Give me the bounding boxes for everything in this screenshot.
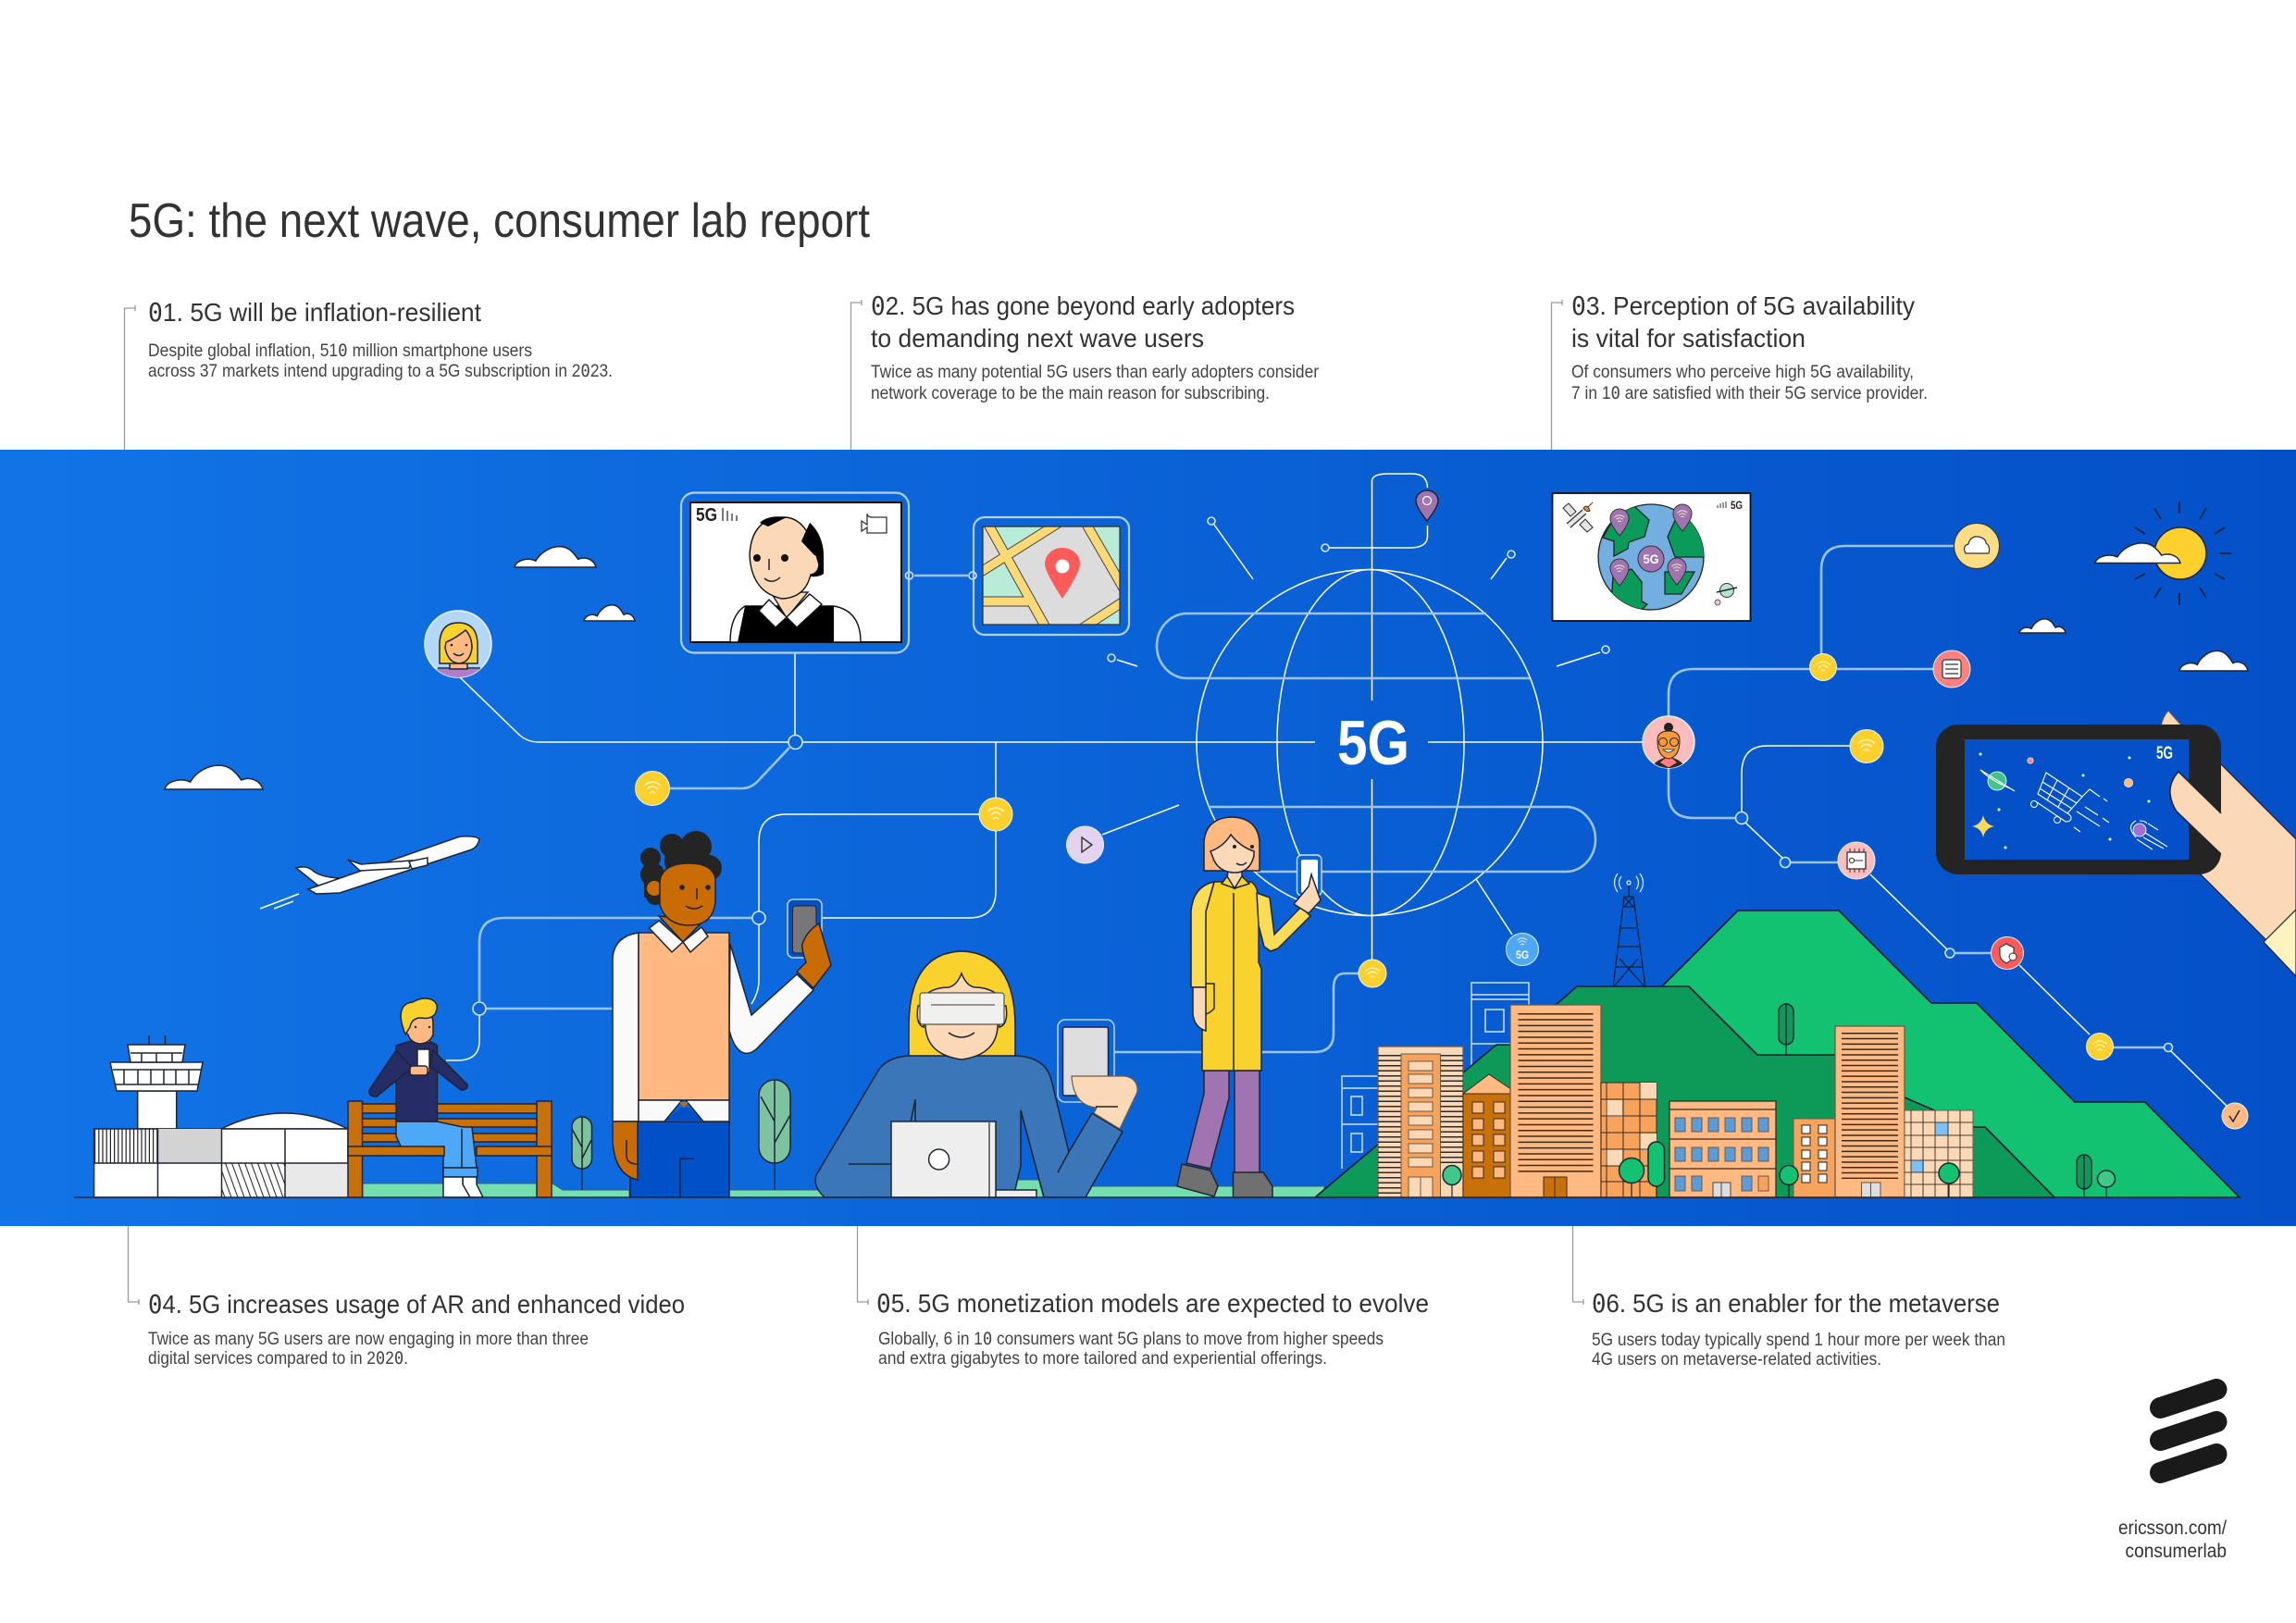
body 05 [878, 1329, 1384, 1369]
building 3 [1510, 1005, 1601, 1197]
thumb [2170, 772, 2221, 854]
panel: finding 01 [124, 297, 613, 450]
icon: satellite earth card: 5G [1731, 499, 1743, 512]
icon: 5G node [1507, 933, 1538, 966]
ghost buildings outline [1342, 983, 1529, 1169]
city trees [1443, 1142, 1959, 1197]
body 05: and extra gigabytes to more tailored and experiential offerings. [878, 1349, 1327, 1369]
panel: finding 03 [1551, 291, 1928, 450]
body 06: 5G users today typically spend 1 hour more per week than [1592, 1331, 2005, 1350]
heading 02: to demanding next wave users [871, 324, 1204, 353]
icon: play button [1066, 826, 1103, 863]
icon: wifi yellow nodes [635, 653, 2114, 1060]
mountain trees [1779, 1004, 2116, 1197]
body 02: Twice as many potential 5G users than early adopters consider [871, 363, 1320, 382]
heading 02 [871, 291, 1295, 353]
body 02 [871, 363, 1320, 403]
icon: sun and clouds [2019, 502, 2248, 671]
heading 03: is vital for satisfaction [1571, 324, 1806, 353]
title: 5G: the next wave, consumer lab report [129, 194, 870, 248]
woman with laptop and VR headset [815, 951, 1137, 1197]
body 04 [148, 1330, 589, 1369]
body 04: digital services compared to in 2020. [148, 1348, 408, 1369]
man with phone [613, 831, 831, 1197]
icon: satellite earth card: 5G [1644, 551, 1659, 566]
body 01 [148, 341, 613, 381]
city buildings [1378, 1005, 1973, 1197]
heading 02: 02. 5G has gone beyond early adopters [871, 291, 1295, 321]
building 5 [1669, 1101, 1776, 1197]
building 4 [1601, 1083, 1657, 1197]
woman in yellow coat [1177, 817, 1322, 1197]
body 03: 7 in 10 are satisfied with their 5G service provider. [1571, 383, 1928, 403]
icon: avatar woman [425, 611, 491, 685]
laptop [891, 1121, 1036, 1197]
body 01: across 37 markets intend upgrading to a 5G subscription in 2023. [148, 361, 613, 381]
torso and arms [630, 1121, 729, 1197]
airport [94, 1035, 348, 1197]
icon: video call tablet: 5G [696, 505, 717, 526]
body 06: 4G users on metaverse-related activities. [1592, 1350, 1881, 1369]
control tower [110, 1035, 203, 1129]
tablet screen content [1972, 744, 2173, 849]
url text: ericsson.com/ [2118, 1518, 2227, 1539]
tablet screen content: 5G [2156, 744, 2173, 763]
body 02: network coverage to be the main reason for subscribing. [871, 384, 1270, 403]
phone [788, 899, 822, 958]
url text: consumerlab [2125, 1541, 2227, 1562]
heading 03: 03. Perception of 5G availability [1571, 291, 1915, 321]
heading 01: 01. 5G will be inflation-resilient [148, 297, 481, 328]
icon: avatar with glasses [1643, 716, 1694, 768]
building 7 [1835, 1026, 1905, 1197]
mountains [1315, 911, 2240, 1197]
phone [1297, 855, 1322, 896]
body 03: Of consumers who perceive high 5G availability, [1571, 363, 1914, 382]
panel: finding 05 [857, 1226, 1429, 1369]
ground line [74, 1196, 2240, 1198]
person on bench [348, 998, 552, 1197]
icon: hand with tablet [1936, 711, 2296, 976]
building 1 [1378, 1047, 1463, 1197]
icon: location pin [1416, 490, 1438, 521]
head [1227, 861, 1242, 888]
heading 03 [1571, 291, 1915, 353]
building 6 [1793, 1119, 1835, 1197]
VR visor [920, 993, 1004, 1024]
icon: map [974, 517, 1129, 635]
panel: finding 04 [128, 1226, 685, 1369]
icon: chip node [1838, 842, 1875, 879]
icon: checklist node [1933, 650, 1970, 688]
body 05: Globally, 6 in 10 consumers want 5G plans to move from higher speeds [878, 1329, 1384, 1349]
5G label: 5G [1337, 708, 1409, 778]
heading 04: 04. 5G increases usage of AR and enhanced video [148, 1289, 685, 1319]
icon: check node [2222, 1103, 2248, 1129]
panel: finding 02 [851, 291, 1320, 450]
park trees [572, 1080, 790, 1190]
globe [1157, 474, 1595, 960]
icon: plane [260, 836, 479, 909]
network lines [446, 517, 2227, 1106]
illustration band [0, 450, 2296, 1226]
clouds left [165, 547, 635, 789]
building 2 [1463, 1074, 1518, 1197]
terminal [94, 1113, 348, 1197]
head [659, 916, 703, 942]
icon: 5G node: 5G [1516, 948, 1529, 961]
body 03 [1571, 363, 1928, 403]
phone [1058, 1020, 1114, 1102]
url text [2118, 1518, 2227, 1562]
bench [348, 1101, 552, 1197]
heading 05: 05. 5G monetization models are expected to evolve [876, 1288, 1429, 1319]
building 8 [1905, 1110, 1973, 1197]
icon: satellite earth card [1553, 493, 1751, 621]
heading 06: 06. 5G is an enabler for the metaverse [1592, 1288, 2000, 1319]
icon: shield node [1992, 936, 2023, 970]
logo [2160, 1390, 2216, 1473]
icon: video call tablet [681, 492, 909, 653]
body 01: Despite global inflation, 510 million smartphone users [148, 341, 532, 361]
body 06 [1592, 1331, 2005, 1369]
body 04: Twice as many 5G users are now engaging in more than three [148, 1330, 589, 1349]
icon: cloud node [1955, 524, 1999, 568]
ground strip [363, 1180, 1324, 1197]
icon: radio tower [1613, 873, 1645, 987]
panel: finding 06 [1573, 1226, 2005, 1369]
